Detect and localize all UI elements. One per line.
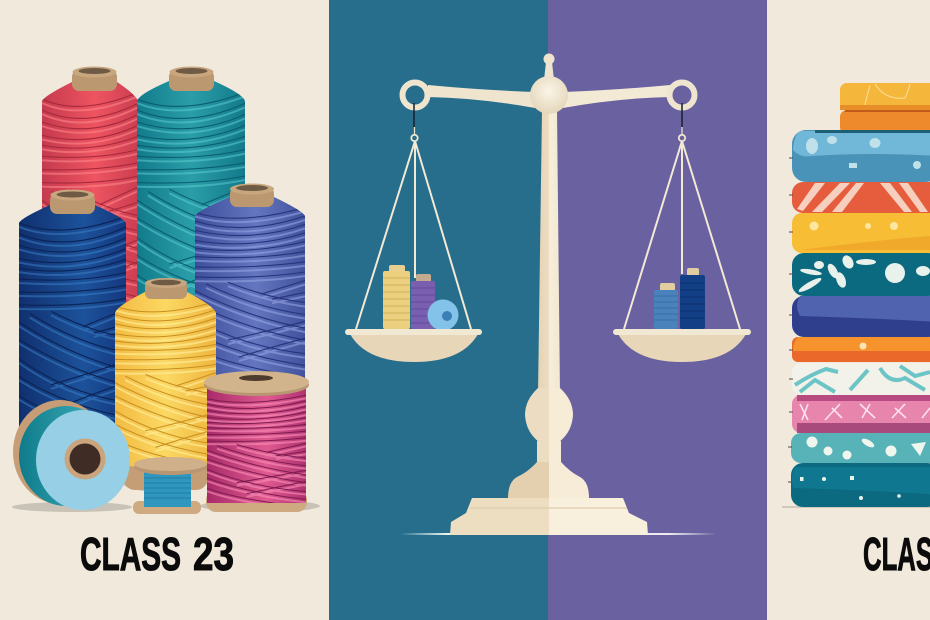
icon: spool shadows bbox=[12, 468, 320, 512]
fabric: top yellow bbox=[840, 83, 930, 110]
illustration: fabric stack bbox=[782, 83, 930, 508]
fabric: dark teal floral bbox=[792, 253, 930, 296]
panel: purple centre background bbox=[548, 0, 768, 620]
fabric: white and aqua pattern bbox=[792, 363, 930, 395]
right pan spools bbox=[654, 268, 705, 329]
right beam ring bbox=[670, 82, 694, 108]
fabric shadow bbox=[782, 506, 930, 508]
left pan spools bbox=[383, 265, 458, 330]
fabric: golden yellow bbox=[792, 213, 930, 253]
right beam arm bbox=[563, 85, 670, 108]
left beam arm bbox=[428, 85, 535, 108]
left pan bbox=[345, 329, 482, 362]
illustration: balance scale bbox=[345, 54, 751, 535]
scale finial bbox=[544, 54, 554, 80]
left beam ring bbox=[402, 82, 428, 108]
scale pivot ball bbox=[530, 76, 568, 114]
fabric: aqua floral bbox=[791, 433, 930, 463]
icon: pink spool bbox=[204, 371, 309, 512]
icon: teal spool bbox=[137, 66, 245, 316]
panel: right cream background bbox=[767, 0, 930, 620]
fabric: bottom teal bbox=[791, 463, 930, 507]
fabric: orange bbox=[840, 110, 930, 134]
panel: teal centre background bbox=[329, 0, 549, 620]
heading: class 23 label: 23 bbox=[193, 528, 234, 580]
ground line bbox=[400, 533, 716, 535]
fabric: pink crosses bbox=[792, 395, 930, 433]
fabric: indigo bbox=[792, 296, 930, 337]
scale post bbox=[538, 110, 560, 395]
fabric edge ticks bbox=[788, 158, 793, 482]
icon: yellow spool bbox=[115, 278, 216, 490]
right hanger bbox=[624, 103, 740, 329]
fabric: red stripes bbox=[792, 182, 930, 213]
illustration: thread spools, class 23 bbox=[12, 66, 320, 514]
scale base bbox=[450, 388, 648, 535]
icon: navy spool bbox=[19, 190, 126, 436]
icon: light blue bobbin bbox=[13, 400, 130, 510]
panel: left cream background bbox=[0, 0, 330, 620]
icon: periwinkle spool bbox=[195, 184, 305, 381]
heading: class 23 label: CLASS bbox=[80, 528, 181, 580]
fabric: orange band bbox=[792, 337, 930, 362]
fabric: sky blue dotted bbox=[792, 130, 930, 182]
right pan bbox=[613, 329, 751, 362]
left hanger bbox=[356, 103, 471, 329]
icon: red spool bbox=[42, 66, 138, 316]
icon: small blue spool bbox=[133, 457, 207, 514]
